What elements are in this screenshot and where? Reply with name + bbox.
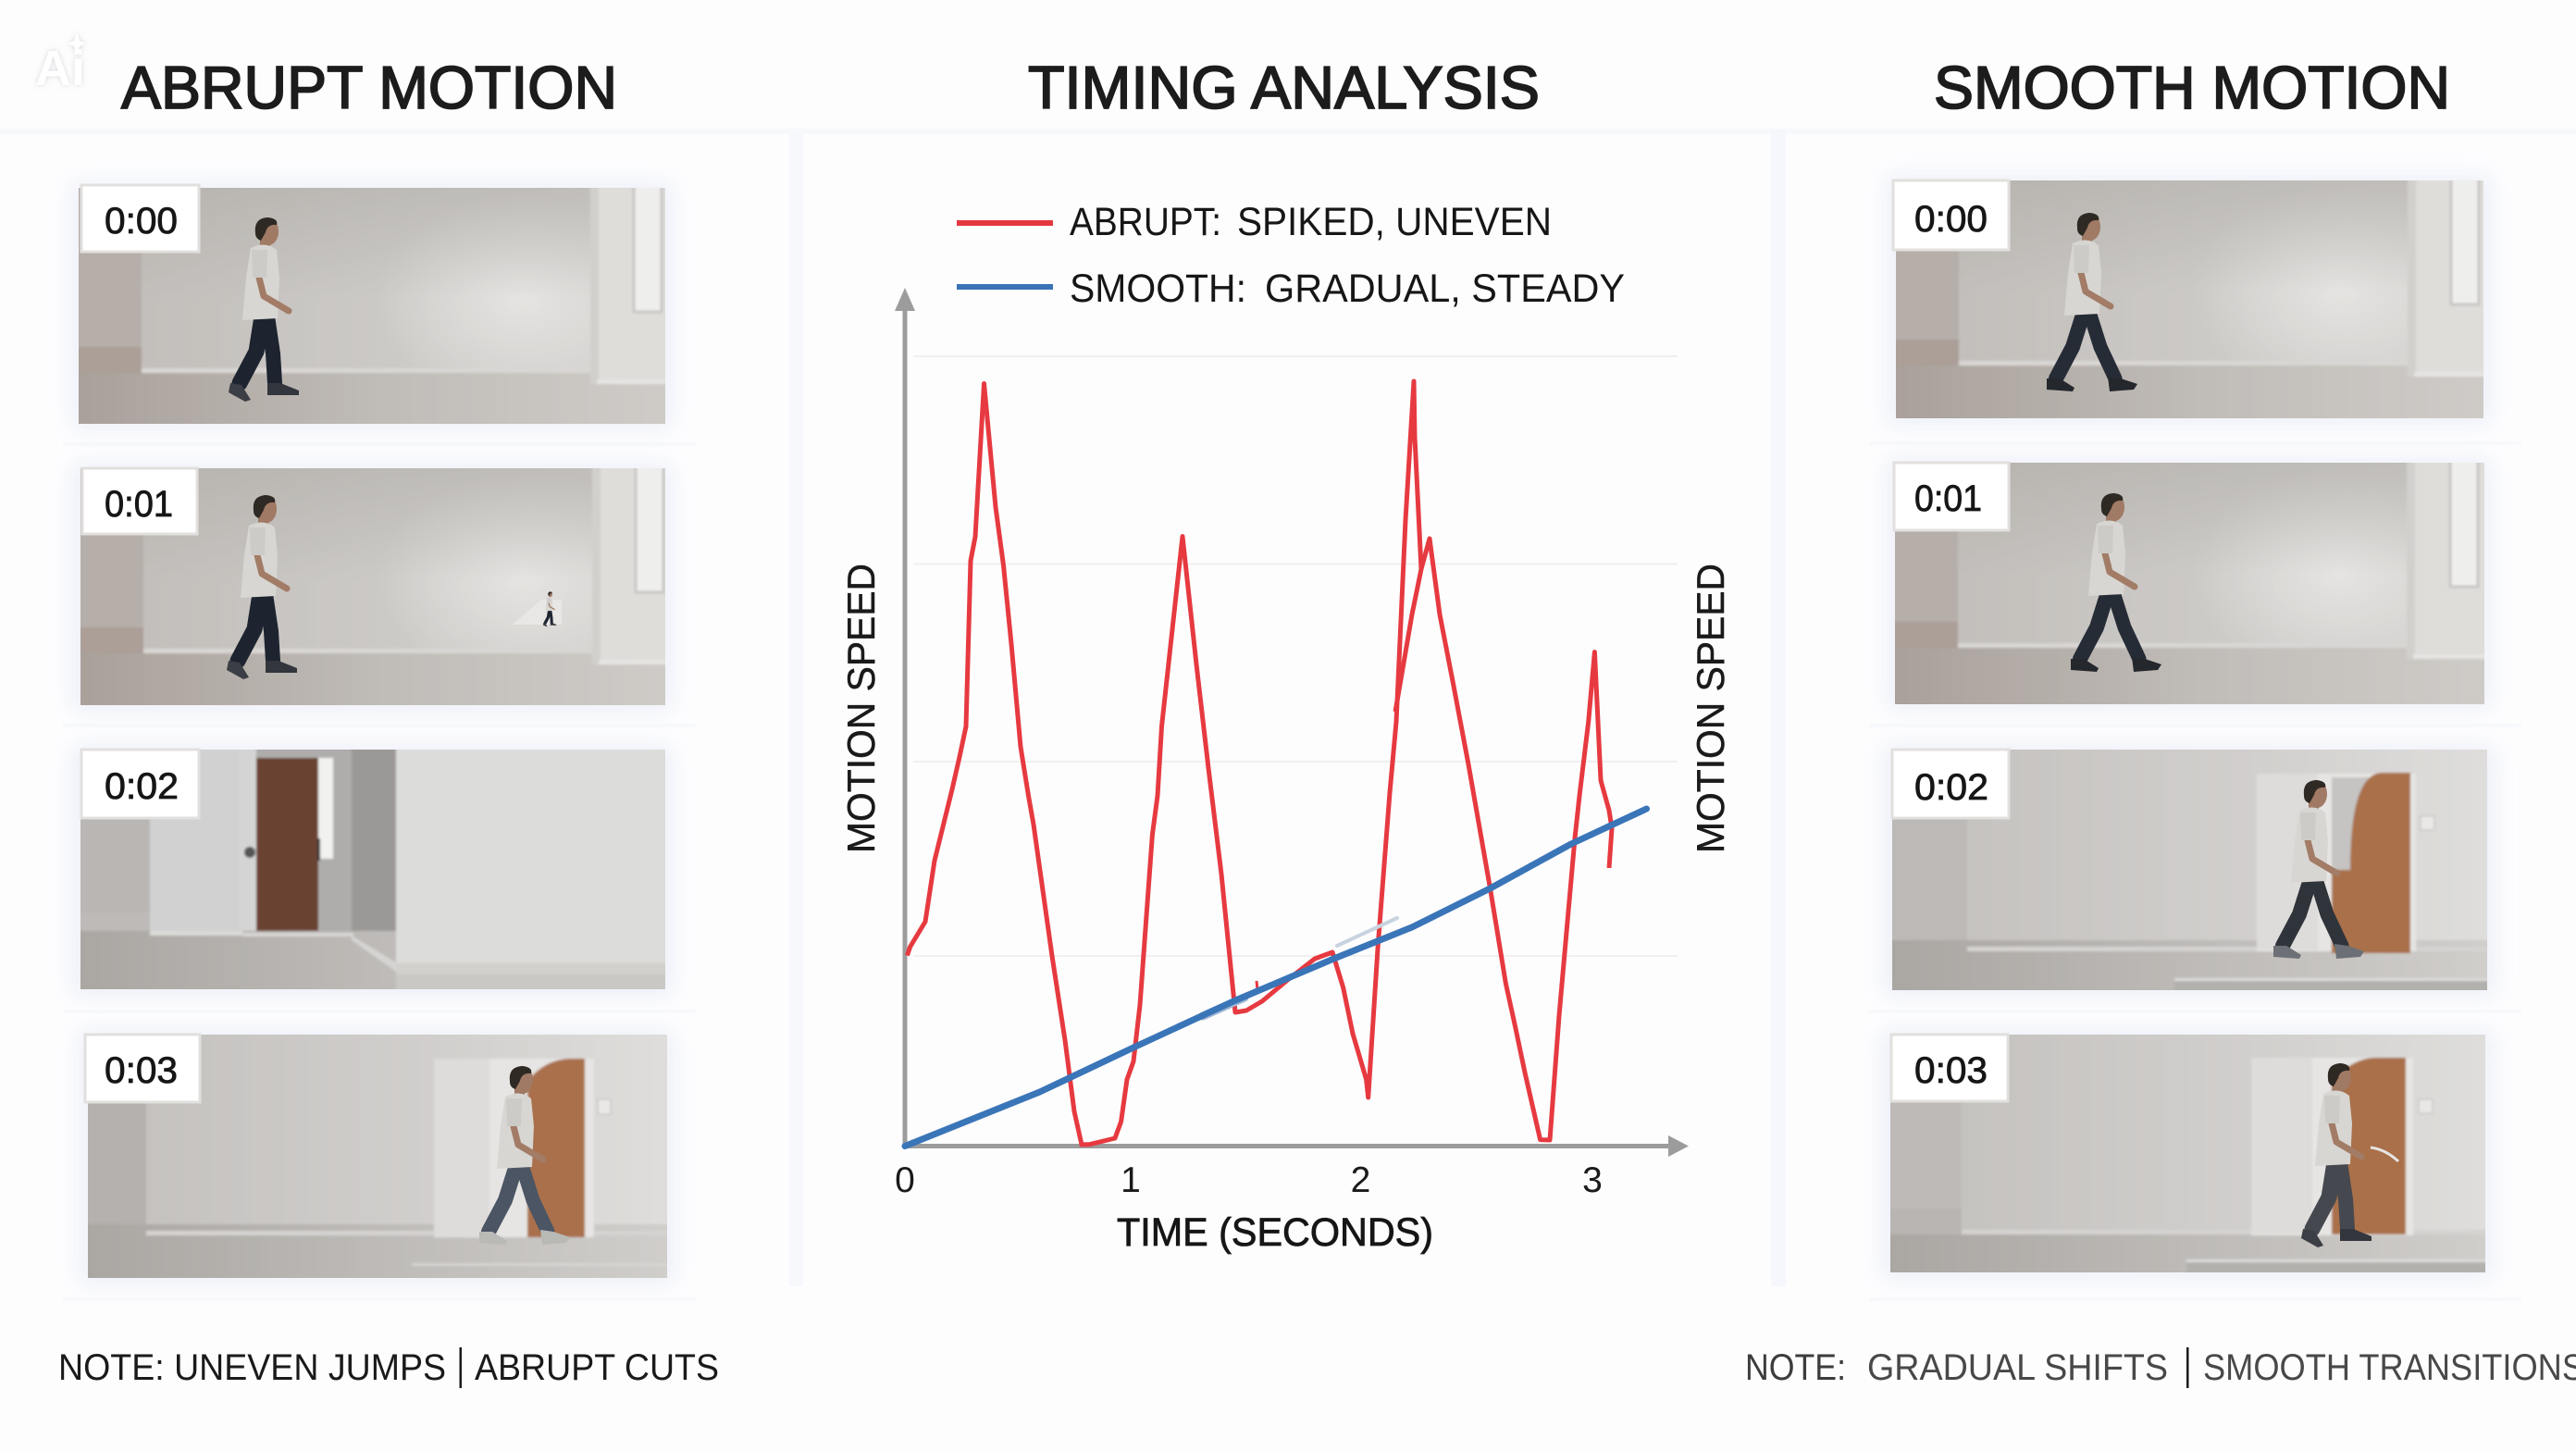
note: smooth: GRADUAL SHIFTS <box>1867 1347 2168 1388</box>
panel: abrupt motion frames <box>72 183 696 1284</box>
legend: SMOOTH: <box>1070 267 1246 311</box>
x ticks: 1 <box>1121 1160 1141 1200</box>
frame 0:02 smooth <box>1888 745 2492 995</box>
frame 0:02 abrupt <box>76 745 670 994</box>
abrupt curve (red) <box>907 381 1612 1145</box>
frame 0:03 smooth: 0:03 <box>1914 1050 1988 1091</box>
title: timing analysis: TIMING ANALYSIS <box>1028 54 1540 121</box>
panel: timing analysis chart <box>839 200 1732 1255</box>
frame 0:01 abrupt: 0:01 <box>105 484 173 525</box>
frame 0:00 smooth <box>1891 176 2511 435</box>
gridlines <box>913 356 1678 956</box>
note: abrupt: ABRUPT CUTS <box>475 1347 719 1388</box>
frame 0:03 abrupt <box>83 1030 672 1283</box>
frame 0:01 smooth: 0:01 <box>1914 478 1982 519</box>
frame shadows right <box>1882 176 2495 1279</box>
frame 0:02 smooth: 0:02 <box>1914 767 1988 808</box>
watermark: Ai logo: Ai <box>35 41 85 96</box>
frame 0:01 abrupt <box>76 464 696 723</box>
axes <box>895 288 1689 1157</box>
x ticks: 0 <box>895 1160 915 1200</box>
legend: ABRUPT: <box>1070 200 1221 244</box>
panel: smooth motion frames <box>1882 176 2511 1279</box>
y axis label right: MOTION SPEED <box>1689 564 1732 853</box>
smooth curve (blue) <box>905 809 1647 1146</box>
frame 0:00 abrupt <box>74 183 694 442</box>
frame 0:02 abrupt: 0:02 <box>105 766 179 807</box>
note: abrupt <box>58 1347 719 1388</box>
frame shadows left <box>72 183 674 1284</box>
frame 0:03 abrupt: 0:03 <box>105 1050 178 1091</box>
frame 0:01 smooth <box>1890 458 2510 717</box>
legend: GRADUAL, STEADY <box>1265 267 1625 311</box>
x ticks: 3 <box>1582 1160 1603 1200</box>
x ticks <box>895 1160 1603 1200</box>
frame 0:03 smooth <box>1886 1030 2490 1277</box>
legend: SPIKED, UNEVEN <box>1237 200 1552 244</box>
frame 0:00 smooth: 0:00 <box>1914 199 1988 240</box>
note: smooth: NOTE: <box>1745 1347 1846 1388</box>
x axis label: TIME (SECONDS) <box>1117 1210 1433 1255</box>
y axis label left: MOTION SPEED <box>839 564 883 853</box>
title: abrupt motion: ABRUPT MOTION <box>121 54 617 121</box>
title: smooth motion: SMOOTH MOTION <box>1934 54 2450 121</box>
frame 0:00 abrupt: 0:00 <box>105 201 178 242</box>
legend <box>957 200 1625 311</box>
note: abrupt: NOTE: UNEVEN JUMPS <box>58 1347 446 1388</box>
x ticks: 2 <box>1351 1160 1370 1200</box>
note: smooth <box>1745 1347 2576 1388</box>
